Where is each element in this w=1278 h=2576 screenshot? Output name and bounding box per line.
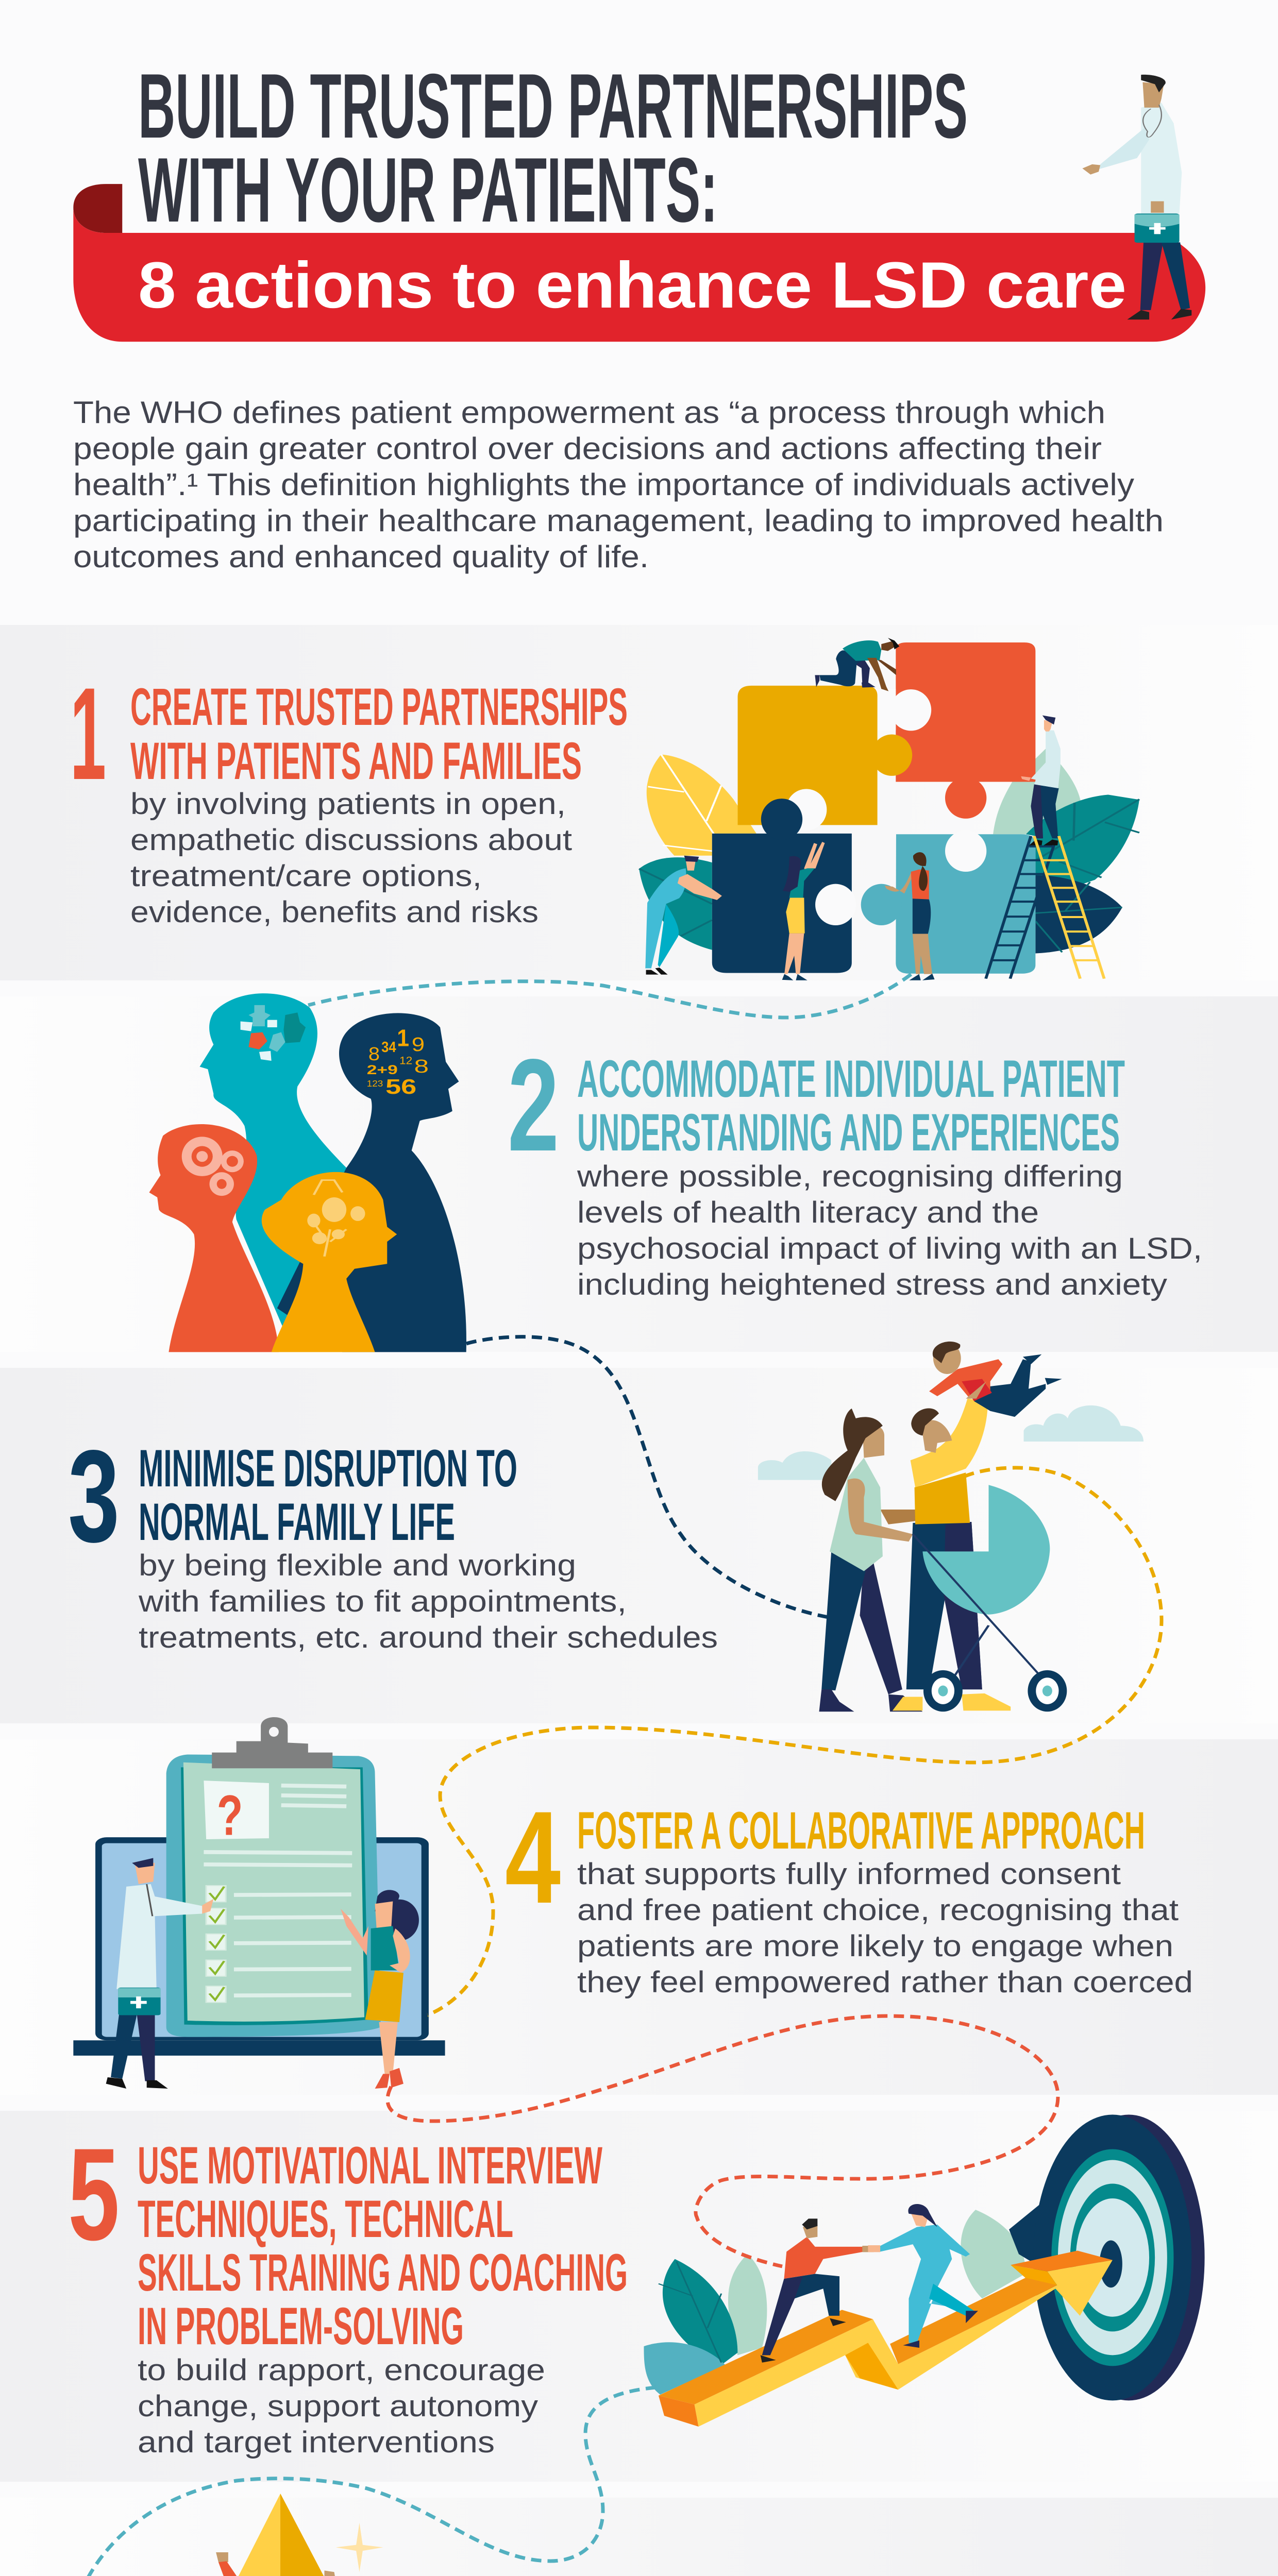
head: navy with numbers: 9: [412, 1033, 425, 1056]
person: doctor pointing: [106, 1858, 213, 2089]
body 3: treatments, etc. around their schedules: [139, 1621, 718, 1654]
body 4: they feel empowered rather than coerced: [577, 1965, 1193, 1999]
body 1: [130, 787, 572, 929]
panel: action 5: [0, 2111, 1278, 2482]
head: navy with numbers: [277, 1013, 466, 1352]
intro text: participating in their healthcare management, leading to improved health: [73, 503, 1164, 538]
head: yellow with flowers: [262, 1172, 397, 1352]
number 5: 5: [68, 2121, 120, 2268]
body 2: [577, 1160, 1202, 1301]
intro text: health”.¹ This definition highlights the importance of individuals actively: [73, 467, 1134, 502]
leaves: [639, 749, 1139, 953]
heading 5: USE MOTIVATIONAL INTERVIEW: [138, 2136, 602, 2195]
person: pushing left: [645, 856, 722, 975]
star: [129, 2494, 430, 2576]
person: celebrating: [174, 2552, 336, 2576]
heading 3: [139, 1439, 517, 1551]
body 2: including heightened stress and anxiety: [577, 1268, 1167, 1301]
illustration: puzzle team: [639, 638, 1139, 980]
icon: walking doctor with bag: [1082, 75, 1191, 319]
head: navy with numbers: 8: [368, 1043, 380, 1064]
heading 3: MINIMISE DISRUPTION TO: [139, 1439, 517, 1498]
body 5: and target interventions: [138, 2426, 495, 2459]
arrow: [659, 2251, 1113, 2427]
body 1: empathetic discussions about: [130, 823, 572, 857]
body 3: [138, 1549, 718, 1654]
connector: dashed path 5 to 6: [69, 2387, 656, 2576]
intro text: The WHO defines patient empowerment as “a process through which: [73, 395, 1105, 430]
head: navy with numbers: 1: [397, 1025, 409, 1052]
connector: dashed path 3 to 4: [428, 1468, 1162, 2015]
body 2: where possible, recognising differing: [577, 1160, 1123, 1193]
illustration: family with stroller: [758, 1342, 1144, 1711]
heading 5: IN PROBLEM-SOLVING: [138, 2297, 464, 2355]
ribbon banner: [73, 184, 1205, 342]
person: woman with ponytail: [885, 852, 935, 980]
panel: action 3: [0, 1342, 1278, 1723]
sparkles: [125, 2523, 383, 2576]
illustration: clipboard and laptop: [73, 1717, 445, 2089]
heading 1: WITH PATIENTS AND FAMILIES: [130, 732, 582, 790]
head: navy with numbers: 8: [414, 1056, 429, 1077]
head: navy with numbers: 56: [385, 1075, 416, 1098]
illustration: person with star: [90, 2494, 458, 2576]
leaves: [644, 2210, 1025, 2395]
stroller: [913, 1485, 1067, 1711]
person: nurse helping: [868, 2204, 978, 2348]
panel: action 6: [0, 2494, 1278, 2576]
body 4: and free patient choice, recognising that: [577, 1893, 1179, 1927]
person: kneeling on puzzle: [815, 638, 899, 691]
number 3: 3: [68, 1423, 120, 1570]
body 1: evidence, benefits and risks: [130, 895, 539, 929]
target: [1009, 2115, 1205, 2400]
panel: action 1: 1: [70, 660, 106, 807]
number 2: 2: [508, 1032, 559, 1179]
puzzle pieces: [712, 642, 1035, 974]
person: man climbing: [761, 2218, 873, 2363]
person: woman patient: [341, 1890, 419, 2089]
intro text: outcomes and enhanced quality of life.: [73, 539, 649, 574]
person: doctor on ladder: [1021, 715, 1061, 846]
person: child: [929, 1342, 1062, 1417]
body 4: [577, 1857, 1193, 1999]
illustration: four head silhouettes: [149, 993, 466, 1352]
person: woman reaching up: [782, 842, 825, 980]
clipboard: [166, 1717, 381, 2037]
panel: action 2: [0, 993, 1278, 1352]
heading 5: TECHNIQUES, TECHNICAL: [138, 2190, 513, 2248]
head: orange with gears: [149, 1124, 279, 1352]
body 5: to build rapport, encourage: [138, 2353, 545, 2387]
person: woman: [819, 1409, 950, 1711]
head: navy with numbers: 12: [399, 1055, 412, 1067]
body 2: psychosocial impact of living with an LSD,: [577, 1232, 1202, 1265]
panel: action 4: [0, 1717, 1278, 2095]
head: teal with puzzle pieces: [199, 993, 346, 1333]
head: navy with numbers: 2+9: [367, 1063, 398, 1077]
title: [138, 55, 968, 241]
intro text: [73, 395, 1164, 574]
body 2: levels of health literacy and the: [577, 1196, 1039, 1229]
body 4: patients are more likely to engage when: [577, 1929, 1173, 1963]
heading 5: [138, 2136, 628, 2355]
heading 5: SKILLS TRAINING AND COACHING: [138, 2243, 628, 2302]
head: navy with numbers: 123: [367, 1078, 383, 1088]
body 1: treatment/care options,: [130, 859, 482, 893]
header: [73, 55, 1205, 342]
body 5: [138, 2353, 545, 2459]
heading 2: [577, 1049, 1125, 1162]
body 1: by involving patients in open,: [130, 787, 566, 821]
title: WITH YOUR PATIENTS:: [138, 139, 718, 241]
body 3: with families to fit appointments,: [138, 1585, 627, 1618]
connector: dashed path 1 to 2: [308, 974, 911, 1018]
body 4: that supports fully informed consent: [577, 1857, 1121, 1891]
heading 1: CREATE TRUSTED PARTNERSHIPS: [130, 677, 628, 736]
body 5: change, support autonomy: [138, 2389, 538, 2423]
panel: action 1: [0, 625, 1278, 980]
number 4: 4: [505, 1784, 561, 1931]
connector: dashed path 2 to 3: [466, 1337, 831, 1618]
laptop: [73, 1837, 445, 2056]
illustration: target and arrow: [644, 2115, 1205, 2427]
person: man lifting child: [893, 1399, 1011, 1710]
intro text: people gain greater control over decisions and actions affecting their: [73, 431, 1102, 466]
ladders: [986, 836, 1104, 979]
heading 3: NORMAL FAMILY LIFE: [139, 1493, 455, 1551]
connector: dashed path 4 to 5: [388, 2016, 1058, 2266]
head: navy with numbers: 34: [381, 1039, 396, 1055]
body 3: by being flexible and working: [139, 1549, 576, 1582]
clipboard: ?: [217, 1784, 243, 1847]
heading 1: [130, 677, 628, 790]
clouds: [758, 1405, 1144, 1480]
subtitle: 8 actions to enhance LSD care: [138, 248, 1126, 321]
